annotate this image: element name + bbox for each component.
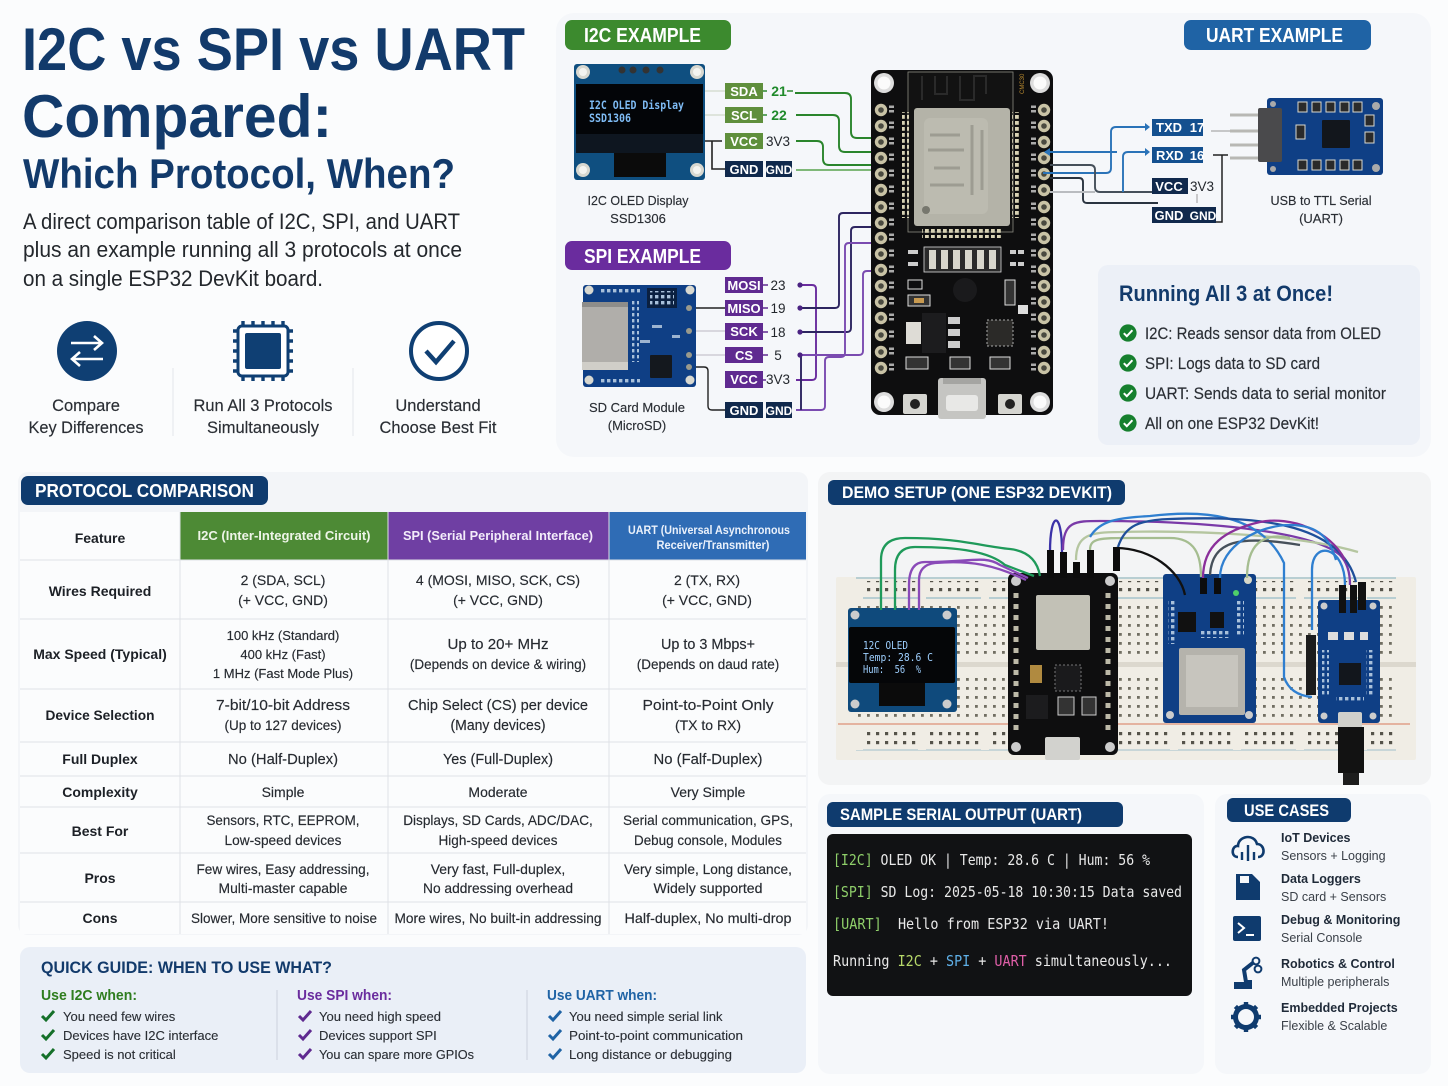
column: use SPI: You need high speed [319,1009,441,1024]
row: max speed: (Depends on daud rate) [637,657,779,672]
label: run all protocols: Run All 3 Protocols [194,397,332,415]
row: max speed: (Depends on device & wiring) [410,657,586,672]
SPI pin labels: MOSI [727,278,761,293]
UART pin labels: 17 [1190,120,1204,135]
heading: use cases [1227,798,1351,822]
row: max speed: Max Speed (Typical) [33,646,167,662]
label: compare [28,397,144,437]
SD caption: SD Card Module [589,400,685,415]
SPI pin labels: 5 [774,348,782,363]
row: complexity: Complexity [62,784,138,800]
row: cons: Slower, More sensitive to noise [191,910,377,926]
icon: compare arrows [57,321,117,381]
panel: running all 3 at once: Running All 3 at Once! [1119,281,1333,306]
column: use UART: Long distance or debugging [569,1047,732,1062]
demo USB TTL [1306,582,1380,785]
row: max speed: Up to 3 Mbps+ [661,637,755,653]
row: max speed: 1 MHz (Fast Mode Plus) [213,666,353,681]
ESP32 DevKit board: CMC30 [1020,73,1026,94]
table header: Feature [75,530,125,546]
UART pin labels: TXD [1156,120,1182,135]
row: wires required [49,572,752,608]
row: full duplex: No (Half-Duplex) [228,752,338,768]
row: cons: Cons [82,910,118,926]
use case: embedded projects: Embedded Projects [1281,1001,1398,1015]
table header: SPI (Serial Peripheral Interface) [403,528,593,543]
I2C pin labels [705,83,793,177]
UART pin labels: GND [1190,209,1217,223]
panel: running all 3 at once [1098,265,1420,445]
row: complexity: Very Simple [671,784,746,800]
use case: debug and monitoring [1233,913,1400,945]
row: pros: Very simple, Long distance, [624,861,792,877]
UART pin labels: VCC [1155,179,1183,194]
column: use SPI: Devices support SPI [319,1028,437,1043]
row: device selection: Point-to-Point Only [642,697,774,714]
demo OLED: Temp: 28.6 C [863,651,933,664]
use case: IoT devices: Sensors + Logging [1281,849,1386,863]
panel: protocol comparison [18,472,808,935]
row: max speed: Up to 20+ MHz [448,636,548,653]
heading: use cases: USE CASES [1244,801,1329,820]
row: complexity: Simple [262,784,305,800]
checklist: All on one ESP32 DevKit! [1145,415,1319,433]
row: device selection: (Up to 127 devices) [224,717,342,733]
terminal [827,834,1192,996]
SPI pin labels: 19 [770,301,786,316]
column: use SPI: Use SPI when: [297,988,392,1004]
intro text block: A direct comparison table of I2C, SPI, and UART [23,209,460,234]
row: wires required: Wires Required [49,583,151,599]
breadboard [836,577,1416,760]
heading: quick guide: QUICK GUIDE: WHEN TO USE WHAT? [41,959,332,977]
heading: I2C example: I2C EXAMPLE [584,25,701,47]
UART pin labels: RXD [1156,148,1183,163]
SPI pin labels: GND [730,403,758,418]
use case: debug and monitoring: Serial Console [1281,931,1362,945]
resistor array [924,247,1001,272]
I2C pin labels: SDA [730,84,758,99]
row: pros: No addressing overhead [423,880,573,896]
use case: IoT devices: IoT Devices [1281,831,1351,845]
row: full duplex [62,751,763,768]
USB TTL caption [1270,193,1372,226]
terminal: [UART] Hello from ESP32 via UART! [833,915,1109,933]
row: cons [82,910,792,926]
row: wires required: 4 (MOSI, MISO, SCK, CS) [416,572,580,588]
SPI pin labels: MISO [727,301,761,316]
I2C wires [795,93,878,170]
row: max speed: 100 kHz (Standard) [227,628,339,643]
label: understand: Choose Best Fit [380,419,497,437]
SPI pin labels: CS [735,348,753,363]
demo jumper wires [881,514,1358,697]
row: best for: Sensors, RTC, EEPROM, [206,813,360,828]
row: max speed [33,628,779,681]
SPI pin labels [690,277,793,418]
heading: SPI example: SPI EXAMPLE [584,246,701,268]
UART pin labels [1152,119,1217,223]
checklist: SPI: Logs data to SD card [1145,355,1320,373]
table header: I2C (Inter-Integrated Circuit) [198,528,370,543]
row: cons: Half-duplex, No multi-drop [624,910,792,926]
I2C pin labels: 22 [771,107,787,123]
SPI pin labels: 3V3 [766,372,790,387]
right header pins [1031,104,1050,374]
row: full duplex: No (Falf-Duplex) [654,752,763,768]
use case: data loggers: SD card + Sensors [1281,890,1386,904]
SD caption: (MicroSD) [608,418,666,433]
row: pros: Few wires, Easy addressing, [196,862,370,877]
title: Compared: [22,83,332,150]
row: wires required: (+ VCC, GND) [238,592,328,608]
use case: debug and monitoring: Debug & Monitoring [1281,913,1400,927]
checklist: I2C: Reads sensor data from OLED [1145,325,1381,343]
terminal: [SPI] SD Log: 2025-05-18 10:30:15 Data saved [833,883,1182,901]
row: pros: Widely supported [654,880,762,896]
label: run all protocols: Simultaneously [207,419,320,437]
I2C pin labels: GND [730,162,758,177]
row: device selection: 7-bit/10-bit Address [216,697,350,714]
column: use I2C: You need few wires [63,1009,176,1024]
row: best for: Best For [72,823,129,839]
heading: I2C example [565,20,731,50]
table header: UART (Universal Asynchronous [628,525,790,537]
heading: UART example: UART EXAMPLE [1206,25,1343,47]
row: pros: Very fast, Full-duplex, [431,861,565,877]
use case: embedded projects [1231,1001,1398,1033]
SPI pin labels: 18 [770,325,786,340]
I2C pin labels: SCL [731,108,757,123]
row: wires required: (+ VCC, GND) [453,592,543,608]
demo header pins [1047,547,1221,594]
UART pin labels: 3V3 [1190,179,1214,194]
column: use UART: Point-to-point communication [569,1028,743,1043]
heading: UART example [1184,20,1371,50]
row: wires required: (+ VCC, GND) [662,592,752,608]
heading: demo setup: DEMO SETUP (ONE ESP32 DEVKIT) [842,483,1112,502]
OLED display module [574,64,705,180]
left header pins [875,104,894,374]
row: max speed: 400 kHz (Fast) [240,647,326,662]
checklist: UART: Sends data to serial monitor [1145,385,1386,403]
row: best for: Displays, SD Cards, ADC/DAC, [403,813,593,828]
row: device selection [46,697,774,734]
USB connector and buttons [903,378,1022,419]
UART wires [1043,123,1230,222]
panel: quick guide [20,947,806,1073]
intro text block [23,209,462,291]
row: pros: Pros [84,870,116,886]
intro text block: on a single ESP32 DevKit board. [23,266,323,291]
SPI pin labels: VCC [730,372,758,387]
USB TTL caption: USB to TTL Serial [1270,193,1372,208]
row: best for: Low-speed devices [224,832,342,848]
use case: robotics and control: Robotics & Control [1281,957,1395,971]
row: full duplex: Full Duplex [62,751,138,767]
row: best for: High-speed devices [438,832,558,848]
row: cons: More wires, No built-in addressing [394,910,602,926]
row: best for: Debug console, Modules [634,832,782,848]
I2C pin labels: VCC [730,134,758,149]
I2C pin labels: 3V3 [766,134,790,149]
title: I2C vs SPI vs UART [22,16,525,83]
use case: robotics and control [1234,957,1395,989]
column: use I2C: Speed is not critical [63,1047,176,1062]
row: wires required: 2 (TX, RX) [674,572,740,588]
checklist [1119,324,1386,433]
heading: SPI example [565,241,731,270]
label: understand [380,397,497,437]
terminal: [I2C] OLED OK | Temp: 28.6 C | Hum: 56 % [833,851,1150,869]
row: best for [72,812,793,848]
panel: wiring examples [556,13,1431,457]
demo SD module [1163,574,1256,723]
label: compare: Compare [52,397,120,415]
panel: sample serial output [818,794,1204,1074]
heading: protocol comparison [21,476,268,505]
row: best for: Serial communication, GPS, [623,812,793,828]
column: use I2C: Use I2C when: [41,988,137,1004]
intro text block: plus an example running all 3 protocols at once [23,237,462,262]
column: use UART [547,988,743,1062]
label: run all protocols [194,397,332,437]
OLED caption: SSD1306 [610,211,666,226]
SPI pin labels: SCK [730,324,758,339]
label: understand: Understand [395,397,481,415]
label: compare: Key Differences [28,419,144,437]
UART pin labels: 16 [1190,148,1204,163]
SPI pin labels: 23 [770,278,786,293]
row: device selection: (Many devices) [450,718,546,734]
comparison table [20,512,806,934]
SMD components [906,250,1028,369]
demo OLED [848,608,957,712]
title: Which Protocol, When? [23,150,455,197]
row: pros: Multi-master capable [218,880,348,896]
OLED screen text: I2C OLED Display [589,98,684,112]
SD caption [589,400,685,433]
row: device selection: (TX to RX) [675,717,741,733]
row: wires required: 2 (SDA, SCL) [241,572,325,588]
I2C pin labels: 21 [771,83,787,99]
demo OLED text: 12C OLED [863,639,908,652]
USB to TTL module [1230,98,1383,175]
column: use SPI: You can spare more GPIOs [319,1047,474,1062]
row: full duplex: Yes (Full-Duplex) [443,752,553,768]
ESP32 DevKit board [871,70,1053,419]
use case: embedded projects: Flexible & Scalable [1281,1019,1387,1033]
column: use UART: Use UART when: [547,988,657,1004]
OLED caption [588,193,689,226]
USB TTL caption: (UART) [1299,211,1343,226]
use case: data loggers: Data Loggers [1281,872,1361,886]
column: use SPI [297,988,474,1062]
column: use I2C: Devices have I2C interface [63,1028,218,1043]
OLED display module: SSD1306 [589,111,631,125]
table header: Receiver/Transmitter) [656,540,770,552]
use case: IoT devices [1233,831,1386,863]
SPI wires [796,213,878,410]
UART pin labels: GND [1155,208,1183,223]
column: use UART: You need simple serial link [569,1009,723,1024]
demo OLED: Hum: 56 % [863,663,921,676]
row: device selection: Device Selection [46,707,154,723]
terminal: Running I2C + SPI + UART simultaneously... [833,952,1172,970]
use case: data loggers [1236,872,1386,904]
OLED caption: I2C OLED Display [588,193,689,208]
panel: demo setup [818,472,1431,785]
demo ESP32 [1008,573,1118,760]
I2C pin labels: GND [766,163,793,177]
table header [75,512,806,560]
use case: robotics and control: Multiple peripherals [1281,975,1389,989]
row: device selection: Chip Select (CS) per device [408,698,588,714]
SPI pin labels: GND [766,404,793,418]
icon: chip [233,321,293,381]
icon: check circle [411,323,467,379]
title [22,16,525,197]
heading: protocol comparison: PROTOCOL COMPARISON [35,480,254,501]
row: complexity: Moderate [468,784,528,800]
heading: sample serial output: SAMPLE SERIAL OUTPUT (UART) [840,805,1082,824]
ESP32 module shield [902,72,1020,238]
row: complexity [62,784,746,800]
panel: use cases [1215,794,1431,1074]
SD card module [582,285,696,387]
column: use I2C [41,988,218,1062]
row: pros [84,861,792,896]
